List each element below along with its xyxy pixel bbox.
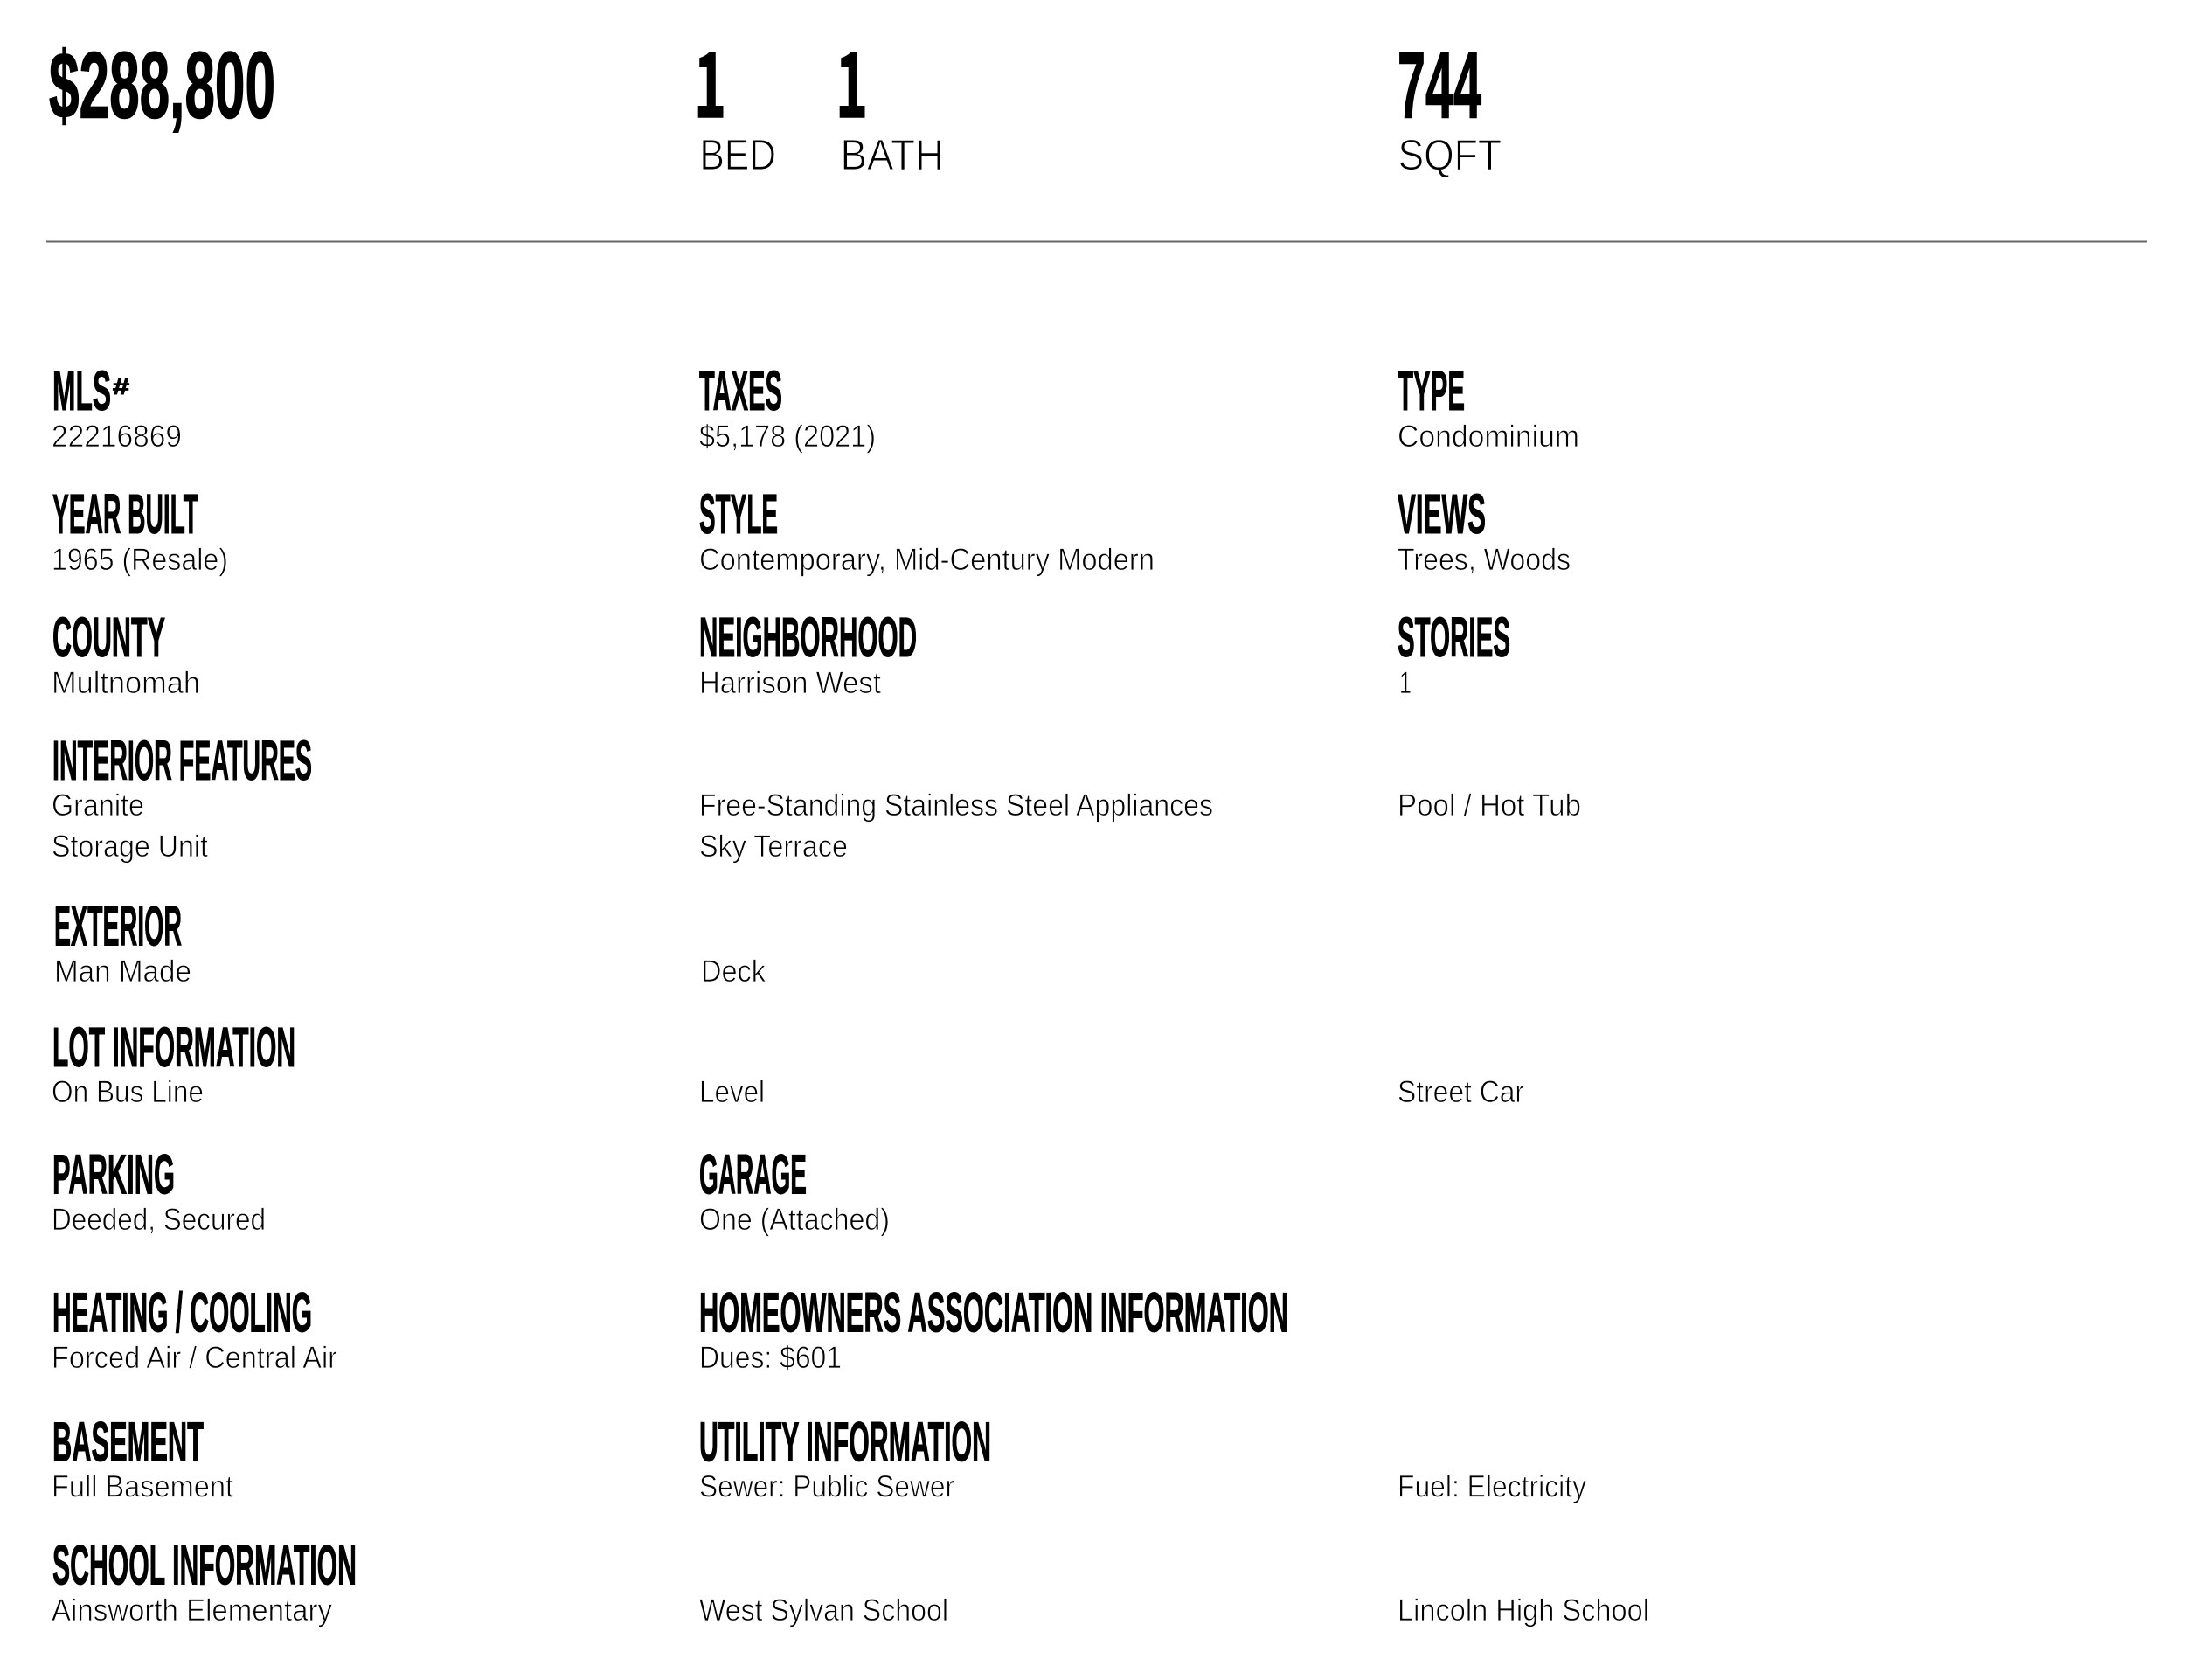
text: VIEWS xyxy=(1398,482,1486,545)
text: STYLE xyxy=(699,482,778,545)
value: man made: Man Made xyxy=(54,955,191,989)
value: taxes: $5,178 (2021) xyxy=(699,420,876,454)
value: elementary school: Ainsworth Elementary xyxy=(52,1593,332,1628)
text: YEAR BUILT xyxy=(52,482,198,545)
text: NEIGHBORHOOD xyxy=(699,606,917,669)
heading: MLS#: # xyxy=(113,375,129,399)
value: sky terrace: Sky Terrace xyxy=(699,830,848,864)
value: type: Condominium xyxy=(1398,420,1579,454)
text: SCHOOL INFORMATION xyxy=(52,1533,357,1596)
text: HEATING / COOLING xyxy=(52,1281,312,1344)
text: EXTERIOR xyxy=(54,895,182,958)
value: style: Contemporary, Mid-Century Modern xyxy=(699,543,1155,577)
value: garage: One (Attached) xyxy=(699,1203,890,1237)
text: PARKING xyxy=(52,1143,175,1206)
value: pool and hot tub: Pool / Hot Tub xyxy=(1398,788,1581,823)
value: dues: Dues: $601 xyxy=(699,1341,842,1375)
text: HOMEOWNERS ASSOCIATION INFORMATION xyxy=(699,1281,1288,1344)
text: STORIES xyxy=(1398,606,1510,669)
value: views: Trees, Woods xyxy=(1398,543,1571,577)
square footage: 744 xyxy=(1398,31,1481,138)
value: year built: 1965 (Resale) xyxy=(52,543,228,577)
text: BASEMENT xyxy=(52,1411,204,1474)
value: sewer: Sewer: Public Sewer xyxy=(699,1470,954,1503)
value: granite: Granite xyxy=(52,788,144,823)
value: stories: 1 xyxy=(1399,666,1412,700)
text: TAXES xyxy=(699,359,782,422)
bath count: 1 xyxy=(836,15,868,143)
value: level: Level xyxy=(699,1075,765,1109)
value: deck: Deck xyxy=(701,955,766,989)
value: appliances: Free-Standing Stainless Steel Appliances xyxy=(699,788,1213,823)
value: MLS number: 22216869 xyxy=(52,420,182,454)
text: INTERIOR FEATURES xyxy=(52,729,312,792)
value: street car: Street Car xyxy=(1398,1075,1524,1109)
value: fuel: Fuel: Electricity xyxy=(1398,1470,1586,1503)
bed label: BED xyxy=(699,132,776,179)
value: neighborhood: Harrison West xyxy=(699,666,881,700)
value: parking: Deeded, Secured xyxy=(52,1203,266,1237)
heading: MLS#: MLS xyxy=(52,359,111,422)
bath label: BATH xyxy=(841,132,944,179)
value: basement: Full Basement xyxy=(52,1470,233,1503)
text: UTILITY INFORMATION xyxy=(699,1411,991,1474)
value: heating and cooling: Forced Air / Central Air xyxy=(52,1341,337,1375)
value: high school: Lincoln High School xyxy=(1398,1593,1649,1628)
heading: MLS# xyxy=(52,359,129,422)
value: county: Multnomah xyxy=(52,666,200,700)
text: TYPE xyxy=(1398,359,1465,422)
square footage label: SQFT xyxy=(1398,132,1502,179)
value: middle school: West Sylvan School xyxy=(699,1593,948,1628)
value: on bus line: On Bus Line xyxy=(52,1075,204,1109)
text: GARAGE xyxy=(699,1143,807,1206)
price: $288,800 xyxy=(49,31,275,138)
text: COUNTY xyxy=(52,606,165,669)
text: LOT INFORMATION xyxy=(52,1016,295,1079)
value: storage unit: Storage Unit xyxy=(52,830,208,864)
bed count: 1 xyxy=(694,15,726,143)
